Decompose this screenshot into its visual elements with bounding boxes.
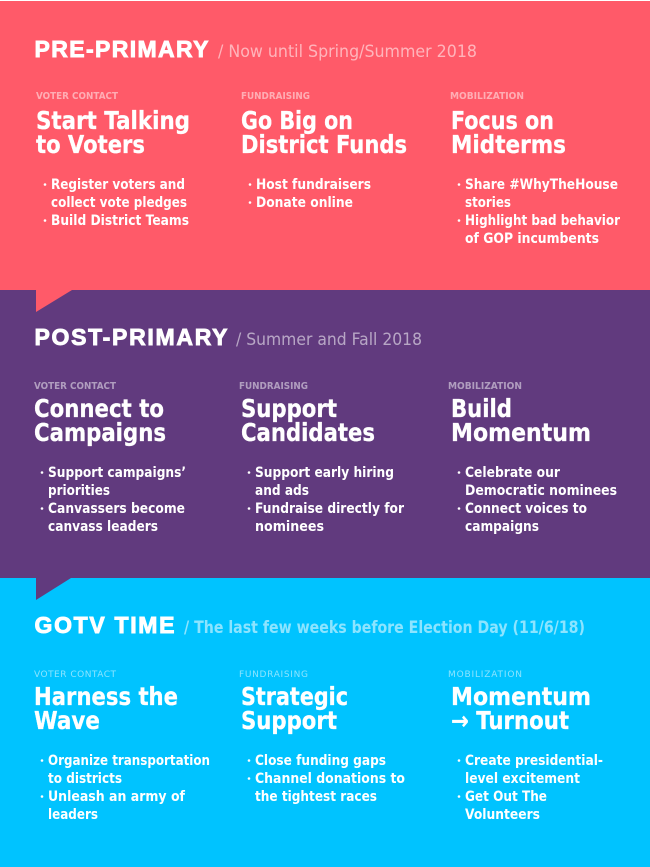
column: voter contact: VOTER CONTACT — [34, 670, 116, 680]
column: voter contact: VOTER CONTACT — [36, 91, 118, 102]
column: mobilization: Volunteers — [465, 807, 540, 823]
panel: pre-primary — [0, 1, 650, 290]
column: fundraising: nominees — [255, 519, 324, 535]
column: voter contact: Harness the — [34, 682, 178, 711]
column: fundraising: Candidates — [241, 418, 375, 447]
column: mobilization — [448, 381, 617, 535]
column: fundraising: Support early hiring — [255, 465, 394, 481]
column: mobilization: Celebrate our — [465, 465, 561, 481]
section title: gotv time: / The last few weeks before Election Day (11/6/18) — [184, 618, 585, 637]
column: fundraising: Channel donations to — [255, 771, 405, 787]
column: voter contact: leaders — [48, 807, 98, 823]
section title: gotv time: GOTV TIME — [34, 612, 174, 638]
column: voter contact: Unleash an army of — [48, 789, 186, 805]
column: mobilization — [448, 670, 603, 823]
column: fundraising — [241, 91, 407, 211]
column: fundraising: Donate online — [256, 195, 353, 211]
column: mobilization: stories — [465, 195, 511, 211]
column: mobilization: Share #WhyTheHouse — [465, 177, 618, 193]
column: mobilization — [450, 91, 621, 247]
column: voter contact: canvass leaders — [48, 519, 158, 535]
column: voter contact: Canvassers become — [48, 501, 185, 517]
column: mobilization: MOBILIZATION — [448, 381, 522, 392]
column: voter contact: Register voters and — [51, 177, 185, 193]
column: fundraising: Go Big on — [241, 106, 353, 135]
column: voter contact — [34, 670, 210, 823]
column: voter contact: Start Talking — [36, 106, 190, 135]
column: voter contact: Build District Teams — [51, 213, 189, 229]
column: fundraising: Close funding gaps — [255, 753, 386, 769]
section title: pre-primary: PRE-PRIMARY — [34, 36, 208, 62]
column: voter contact: to Voters — [36, 130, 145, 159]
column: mobilization: MOBILIZATION — [450, 91, 524, 102]
column: voter contact — [34, 381, 186, 535]
section title: gotv time — [34, 612, 585, 638]
section title: post-primary — [34, 324, 422, 350]
column: mobilization: Momentum — [451, 682, 591, 711]
column: mobilization: Connect voices to — [465, 501, 587, 517]
column: voter contact: priorities — [48, 483, 110, 499]
column: mobilization: Momentum — [451, 418, 591, 447]
column: mobilization: level excitement — [465, 771, 580, 787]
column: fundraising: Support — [241, 394, 337, 423]
section title: post-primary: / Summer and Fall 2018 — [236, 330, 422, 349]
column: fundraising: FUNDRAISING — [239, 670, 308, 680]
column: fundraising: FUNDRAISING — [239, 381, 308, 392]
column: voter contact: Campaigns — [34, 418, 166, 447]
panel: post-primary — [0, 290, 650, 578]
column: voter contact — [36, 91, 190, 229]
column: voter contact: Connect to — [34, 394, 164, 423]
column: mobilization: Democratic nominees — [465, 483, 617, 499]
column: fundraising — [239, 670, 405, 805]
section title: post-primary: POST-PRIMARY — [34, 324, 228, 350]
speech tail: post-primary — [36, 578, 71, 600]
column: mobilization: Build — [451, 394, 512, 423]
column: fundraising: the tightest races — [255, 789, 377, 805]
column: mobilization: → Turnout — [451, 706, 569, 735]
column: mobilization: MOBILIZATION — [448, 670, 522, 680]
panel: gotv time — [0, 578, 650, 867]
speech tail: pre-primary — [36, 290, 72, 312]
column: fundraising: Fundraise directly for — [255, 501, 405, 517]
column: fundraising: FUNDRAISING — [241, 91, 310, 102]
column: fundraising: Strategic — [241, 682, 348, 711]
section title: pre-primary — [34, 36, 477, 62]
column: mobilization: Focus on — [451, 106, 554, 135]
column: voter contact: to districts — [48, 771, 122, 787]
column: fundraising: and ads — [255, 483, 309, 499]
column: mobilization: Create presidential- — [465, 753, 603, 769]
column: fundraising: Support — [241, 706, 337, 735]
column: mobilization: Get Out The — [465, 789, 547, 805]
column: fundraising — [239, 381, 405, 535]
column: fundraising: District Funds — [241, 130, 407, 159]
column: mobilization: Midterms — [451, 130, 566, 159]
column: fundraising: Host fundraisers — [256, 177, 371, 193]
column: voter contact: Support campaigns’ — [48, 465, 186, 481]
column: voter contact: VOTER CONTACT — [34, 381, 116, 392]
section title: pre-primary: / Now until Spring/Summer 2018 — [218, 42, 477, 61]
column: voter contact: Wave — [34, 706, 100, 735]
column: voter contact: Organize transportation — [48, 753, 210, 769]
column: mobilization: of GOP incumbents — [465, 231, 599, 247]
column: voter contact: collect vote pledges — [51, 195, 187, 211]
column: mobilization: Highlight bad behavior — [465, 213, 621, 229]
column: mobilization: campaigns — [465, 519, 539, 535]
